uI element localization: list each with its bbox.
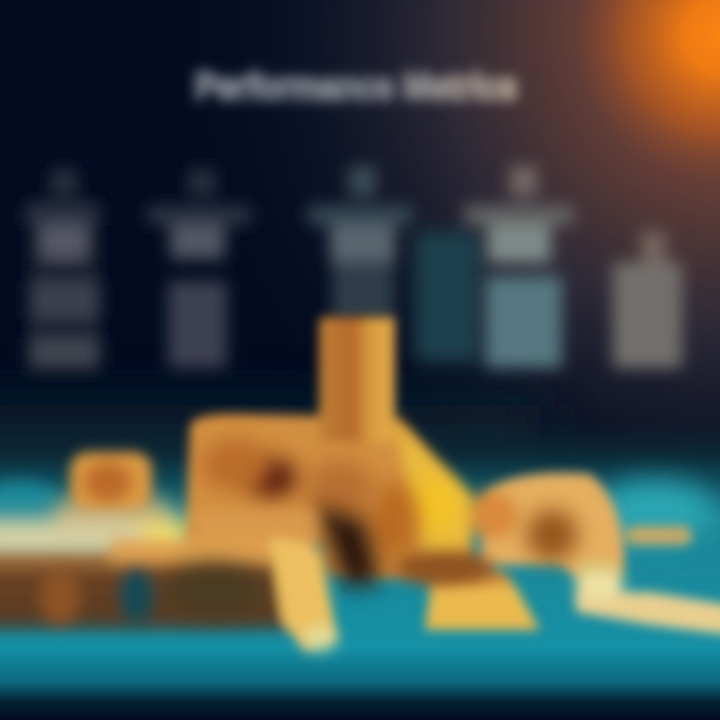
central mass (185, 414, 515, 610)
right flat piece (575, 560, 720, 635)
panel: metric column 2 (147, 168, 252, 368)
small rear nugget (70, 452, 152, 510)
central foot (425, 585, 540, 630)
bottom-left block (0, 538, 338, 652)
panel: metric column 5 (613, 231, 682, 368)
food pile illustration (0, 317, 720, 652)
right arm (626, 526, 692, 545)
panel: metric column 4 (464, 166, 574, 368)
right nugget (466, 473, 624, 585)
panel: metric column 3 (308, 166, 413, 321)
teal floor surface (0, 420, 720, 720)
tower (319, 317, 395, 442)
teal block behind column 4 (415, 232, 480, 362)
title: Performance Metrics (195, 66, 517, 108)
left white band (0, 500, 191, 558)
panel: metric column 1 (25, 168, 100, 370)
